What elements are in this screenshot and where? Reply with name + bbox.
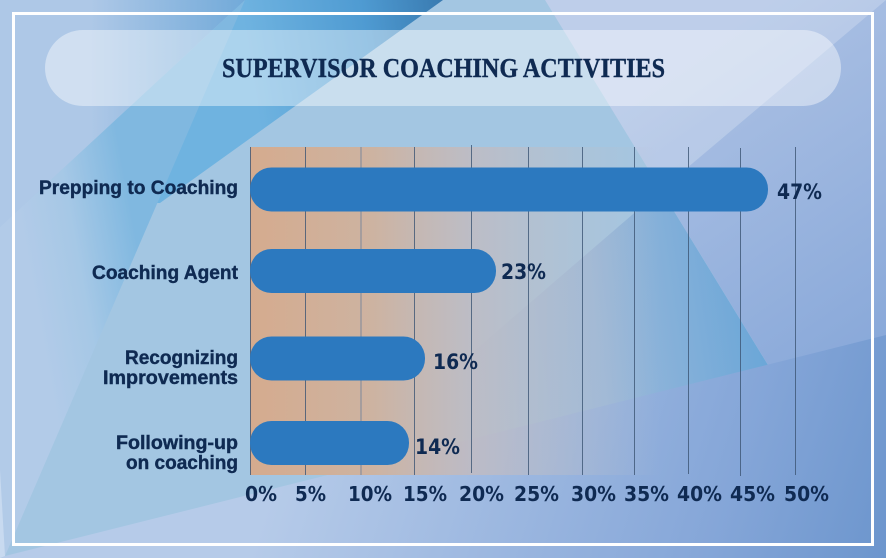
x axis labels: 35% bbox=[624, 482, 669, 506]
bar: Prepping to Coaching 47%: 47% bbox=[777, 180, 822, 204]
x axis labels: 0% bbox=[245, 482, 277, 506]
x axis labels: 20% bbox=[459, 482, 504, 506]
bar: Prepping to Coaching 47% bbox=[39, 168, 822, 212]
grid lines bbox=[250, 145, 796, 476]
bar: Recognizing Improvements 16% bbox=[103, 336, 478, 389]
x axis labels: 10% bbox=[348, 482, 392, 506]
x axis labels: 5% bbox=[295, 482, 326, 506]
x axis labels: 45% bbox=[730, 482, 775, 506]
plot background bbox=[250, 147, 660, 475]
x axis labels: 50% bbox=[784, 482, 829, 506]
x axis labels: 15% bbox=[403, 482, 447, 506]
x axis labels: 30% bbox=[571, 482, 616, 506]
x axis labels bbox=[245, 482, 829, 506]
bar: Recognizing Improvements 16%: 16% bbox=[433, 350, 478, 374]
bar: Following-up on coaching 14%: 14% bbox=[415, 435, 460, 459]
bar: Coaching Agent 23% bbox=[92, 249, 546, 293]
x axis labels: 25% bbox=[514, 482, 559, 506]
bar: Coaching Agent 23%: Coaching Agent bbox=[92, 263, 239, 284]
bar: Recognizing Improvements 16%: Improvements bbox=[103, 368, 238, 389]
bar: Coaching Agent 23%: 23% bbox=[501, 260, 546, 284]
bar: Following-up on coaching 14%: Following-up bbox=[116, 433, 238, 454]
bar chart bbox=[39, 145, 829, 506]
bar: Prepping to Coaching 47%: Prepping to Coaching bbox=[39, 178, 238, 199]
title banner bbox=[45, 30, 841, 106]
bar: Following-up on coaching 14% bbox=[116, 421, 460, 474]
bar: Recognizing Improvements 16%: Recognizing bbox=[125, 348, 238, 369]
x axis labels: 40% bbox=[677, 482, 722, 506]
bar: Following-up on coaching 14%: on coaching bbox=[126, 453, 238, 474]
title: SUPERVISOR COACHING ACTIVITIES bbox=[222, 53, 665, 83]
